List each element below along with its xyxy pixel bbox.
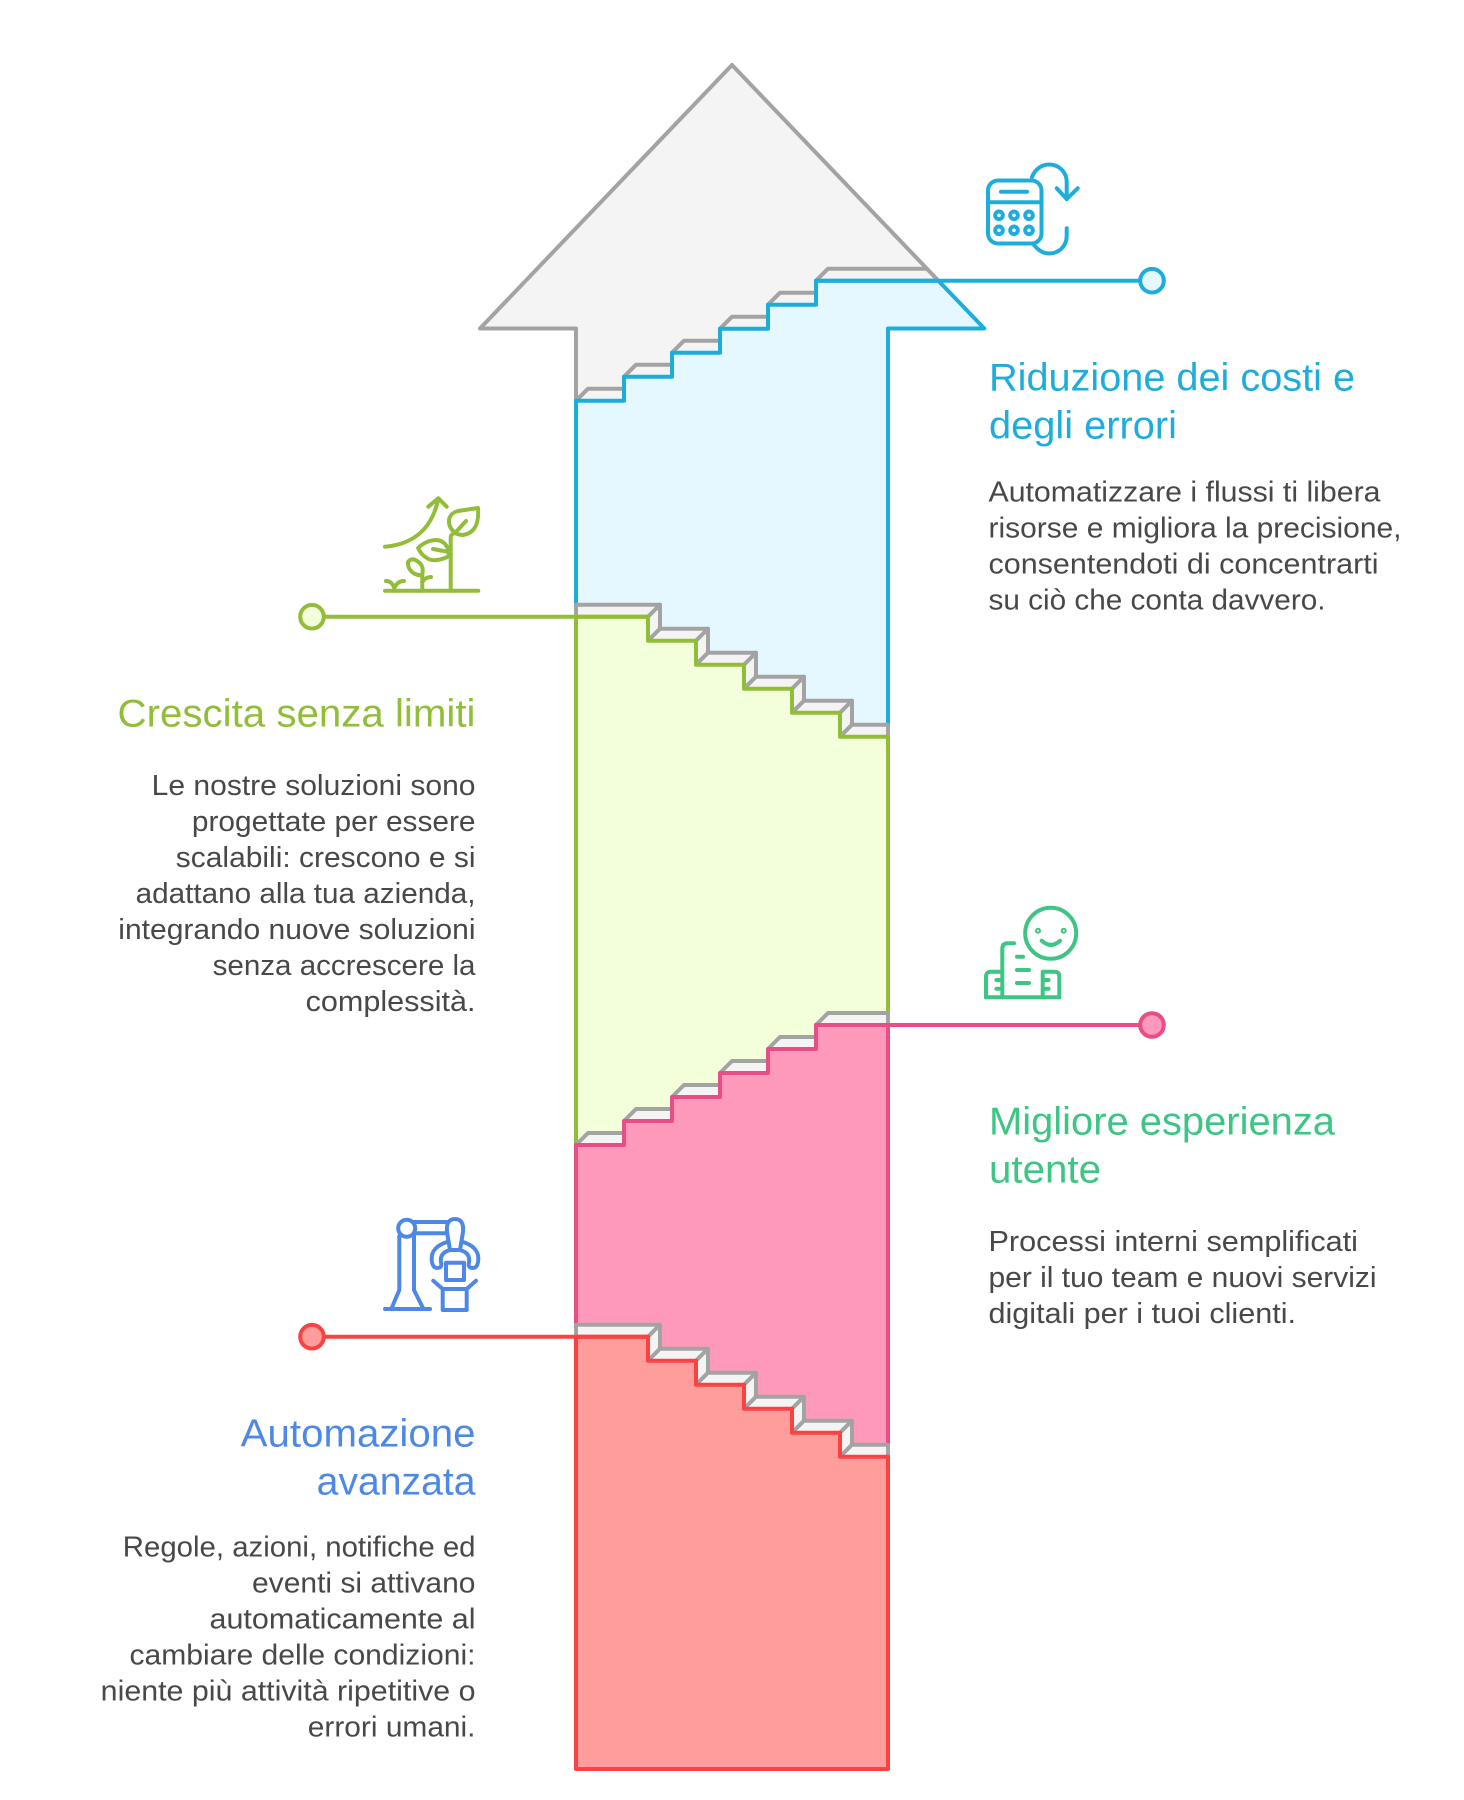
steps: gray treads between blue and green	[576, 605, 888, 737]
description	[101, 1532, 476, 1744]
icon: smiling face and buildings	[986, 908, 1076, 997]
heading: degli errori	[989, 405, 1177, 448]
description: cambiare delle condizioni:	[130, 1640, 476, 1672]
icon: growing plants	[385, 498, 478, 591]
description: niente più attività ripetitive o	[101, 1676, 475, 1708]
heading: Crescita senza limiti	[118, 693, 476, 736]
description: su ciò che conta davvero.	[988, 585, 1326, 617]
panel: blue section	[576, 281, 984, 737]
heading: Migliore esperienza	[989, 1100, 1335, 1144]
description: Automatizzare i flussi ti libera	[988, 477, 1381, 509]
connector: blue line and dot	[816, 269, 1164, 293]
panel: pink section	[576, 1025, 888, 1457]
icon: calculator with cycle arrows	[988, 164, 1078, 254]
heading: Riduzione dei costi e	[989, 357, 1355, 400]
heading	[241, 1413, 476, 1504]
steps: gray treads between green and pink	[576, 1013, 888, 1145]
panel: green section	[576, 617, 888, 1160]
text block: Automazione avanzata	[101, 1413, 476, 1744]
panel: red section	[576, 1337, 888, 1769]
description	[988, 1226, 1376, 1330]
icon: robot arm with box	[385, 1219, 478, 1310]
text block: Riduzione dei costi e degli errori	[988, 357, 1402, 617]
description: scalabili: crescono e si	[176, 842, 476, 874]
steps: gray treads between pink and red	[576, 1325, 888, 1457]
description: digitali per i tuoi clienti.	[988, 1298, 1296, 1330]
heading: Automazione	[241, 1413, 476, 1456]
description: automaticamente al	[210, 1604, 476, 1636]
text block: Migliore esperienza utente	[988, 1100, 1376, 1330]
heading	[989, 357, 1355, 448]
description	[118, 770, 476, 1018]
description: senza accrescere la	[213, 950, 476, 982]
description: integrando nuove soluzioni	[118, 914, 476, 946]
heading	[989, 1100, 1335, 1192]
description: adattano alla tua azienda,	[136, 878, 476, 910]
arrow head and gray background	[480, 65, 984, 420]
description: progettate per essere	[192, 806, 476, 838]
connector: green line and dot	[300, 605, 648, 628]
connector: red line and dot	[300, 1325, 648, 1348]
description: complessità.	[306, 986, 476, 1018]
description: Regole, azioni, notifiche ed	[123, 1532, 476, 1564]
description: consentendoti di concentrarti	[988, 549, 1378, 581]
description: errori umani.	[308, 1712, 476, 1744]
text block: Crescita senza limiti	[118, 693, 476, 1018]
heading: utente	[989, 1148, 1101, 1192]
heading: avanzata	[317, 1460, 476, 1504]
description: Le nostre soluzioni sono	[152, 770, 475, 802]
description: risorse e migliora la precisione,	[988, 513, 1402, 545]
description: per il tuo team e nuovi servizi	[988, 1262, 1376, 1294]
description	[988, 477, 1402, 617]
description: Processi interni semplificati	[988, 1226, 1358, 1258]
connector: pink line and dot	[816, 1013, 1164, 1037]
description: eventi si attivano	[252, 1568, 476, 1600]
